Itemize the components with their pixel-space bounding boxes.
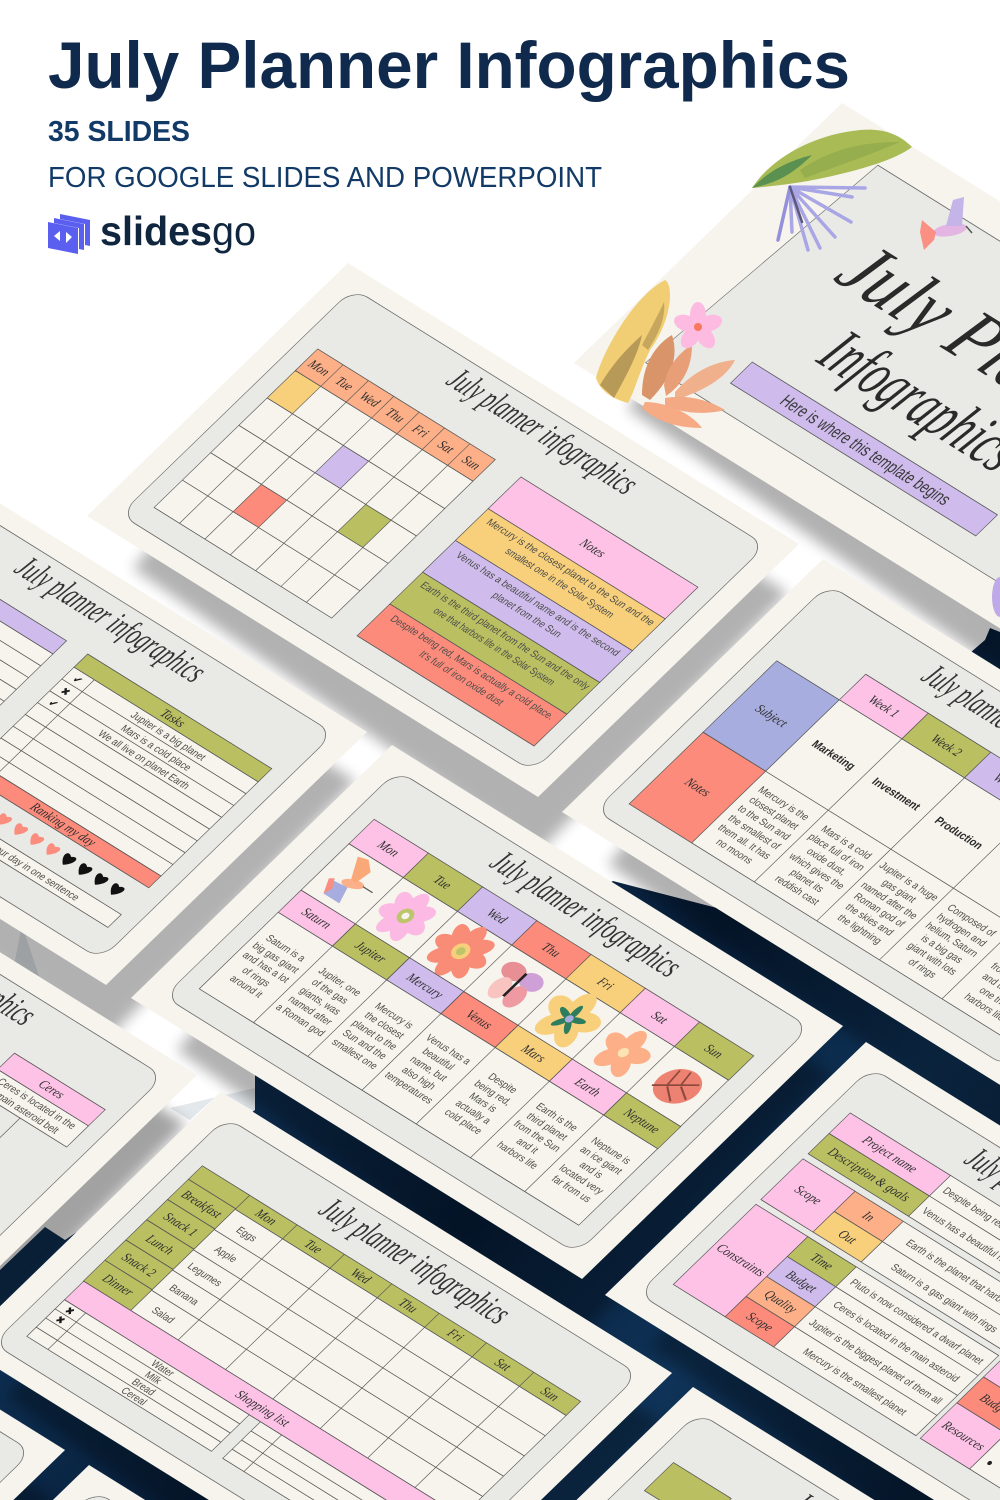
day headers: Sat xyxy=(648,1008,672,1027)
day headers: Sun xyxy=(701,1041,726,1061)
flower cells xyxy=(301,844,728,1126)
shopping table left: Cereal xyxy=(118,1386,149,1408)
planet descriptions: also high xyxy=(399,1065,438,1092)
subject table xyxy=(629,635,1000,1038)
icon: pink flower xyxy=(360,881,450,952)
subject table: Mars is a cold xyxy=(818,824,874,862)
planet descriptions: a Roman god xyxy=(273,1002,327,1039)
subject table: which gives the xyxy=(785,851,847,892)
scope rows: Out xyxy=(835,1227,860,1247)
planet descriptions: Earth is the xyxy=(533,1101,580,1134)
subject table: Week 1 xyxy=(865,693,903,720)
subject table: the lightning xyxy=(834,913,884,947)
meal grid: Lunch xyxy=(142,1231,177,1257)
slide: lower left xyxy=(0,1169,65,1500)
ceres card: Ceres xyxy=(35,1077,68,1102)
tasks table: ✔ xyxy=(45,697,61,710)
tasks table: Jupiter is a big planet xyxy=(127,710,208,763)
ranking header: Ranking my day xyxy=(26,799,100,849)
planet headers: Mercury xyxy=(402,970,447,1002)
subject table: to the Sun and xyxy=(734,804,793,843)
icon: peach flower xyxy=(580,1018,667,1087)
meal grid: Sat xyxy=(491,1355,515,1374)
notes table: planet from the Sun xyxy=(489,590,564,640)
icon: green leaf xyxy=(752,130,912,188)
constraints rows: Constraints xyxy=(713,1241,769,1279)
planet descriptions: Despite xyxy=(485,1072,520,1096)
subject table: them all. It has xyxy=(715,823,773,862)
planet descriptions: planet to the xyxy=(349,1018,400,1053)
subject table: gas giant xyxy=(879,878,918,905)
scope rows: Saturn is a gas giant with rings xyxy=(888,1262,1000,1335)
constraints rows: Mercury is the smallest planet xyxy=(800,1347,909,1418)
notes table xyxy=(357,477,698,746)
planet headers: Neptune xyxy=(620,1105,664,1136)
shopping table left: ✖ xyxy=(61,1305,77,1318)
icon: hummingbird xyxy=(920,197,972,250)
constraints rows: Ceres is located in the main asteroid xyxy=(830,1300,961,1385)
meal grid: Salad xyxy=(148,1305,177,1326)
planet descriptions: giants, was xyxy=(296,985,343,1018)
planet descriptions: and it xyxy=(513,1136,541,1156)
cover title xyxy=(762,228,1000,527)
planet descriptions: Saturn is a xyxy=(263,933,308,964)
tasks table: Tasks xyxy=(157,706,189,730)
meal grid: Eggs xyxy=(233,1225,259,1244)
cover panel xyxy=(646,154,1000,634)
notes table: one that harbors life in the Solar System xyxy=(430,606,557,688)
resources block xyxy=(920,1360,1000,1500)
subject table: Composed of xyxy=(944,903,998,939)
tasks table: ✔ xyxy=(69,674,85,687)
calendar grid: Thu xyxy=(382,405,408,425)
constraints rows: Budget xyxy=(782,1268,821,1296)
scope rows xyxy=(761,1159,1000,1438)
project rows: Project name xyxy=(858,1133,921,1176)
planet headers: Jupiter xyxy=(352,938,390,966)
constraints rows: Jupiter is the biggest planet of them all xyxy=(806,1318,944,1407)
hearts rating xyxy=(0,792,126,898)
day headers: Mon xyxy=(373,837,403,859)
planet descriptions: the closest xyxy=(361,1010,406,1041)
subject table: Production xyxy=(931,815,986,852)
slide: meal planner xyxy=(0,1092,672,1500)
icon: lilac blob at edge xyxy=(992,577,1000,617)
subject table: planet its xyxy=(787,868,826,895)
heading: slide count: 35 SLIDES xyxy=(48,116,190,148)
icon: yellow leaf xyxy=(596,280,670,403)
shopping table left: Milk xyxy=(142,1370,164,1387)
calendar grid: Tue xyxy=(332,374,357,393)
tasks table: Mars is a cold place xyxy=(118,723,194,774)
planet descriptions: Mercury is xyxy=(372,1001,416,1031)
notes table: Notes xyxy=(576,536,609,560)
meal grid: Fri xyxy=(443,1325,467,1344)
notes table: It's full of iron oxide dust xyxy=(416,649,506,708)
planet descriptions: located very xyxy=(556,1163,606,1197)
planet descriptions: and is xyxy=(576,1160,605,1181)
planet descriptions: Mars is xyxy=(466,1091,499,1115)
shopping table left: Water xyxy=(148,1359,177,1380)
meal grid: Banana xyxy=(166,1283,201,1308)
subject table: place full of iron xyxy=(805,832,867,873)
notes table: smallest one in the Solar System xyxy=(502,546,616,621)
planet descriptions: of rings xyxy=(239,965,272,989)
meal grid: Apple xyxy=(211,1245,240,1265)
planet descriptions: name, but xyxy=(407,1054,449,1084)
logo wordmark: slidesgo xyxy=(100,208,256,254)
planet descriptions: Venus has a xyxy=(423,1033,473,1067)
calendar grid: Fri xyxy=(408,421,432,440)
planet descriptions: of the gas xyxy=(308,977,350,1007)
constraints rows: Quality xyxy=(761,1287,801,1316)
planet descriptions: Neptune is xyxy=(588,1136,633,1167)
subject table: is a big gas xyxy=(918,933,965,966)
resources block: Resources xyxy=(938,1418,989,1453)
day headers: Thu xyxy=(538,940,564,960)
ranking header xyxy=(0,639,161,888)
planet descriptions: beautiful xyxy=(419,1046,457,1073)
subject table: named after the xyxy=(858,880,920,922)
planet headers xyxy=(278,890,681,1149)
ceres card xyxy=(0,1053,105,1147)
subject table: hydrogen and xyxy=(934,912,989,949)
subject table: Subject xyxy=(752,702,791,730)
planet descriptions: cold place xyxy=(441,1107,485,1137)
shopping table left: ✖ xyxy=(52,1314,68,1327)
shopping list band: Shopping list xyxy=(232,1387,294,1430)
day headers: Tue xyxy=(430,873,455,892)
subject table: Roman god of xyxy=(851,892,907,930)
meal grid xyxy=(83,1166,581,1500)
cover subtitle band xyxy=(730,362,997,536)
planet descriptions: and has a lot xyxy=(239,950,292,986)
planet descriptions: actually a xyxy=(452,1098,493,1127)
slide title: July planner infographics xyxy=(438,362,647,502)
project rows: Description & goals xyxy=(824,1144,914,1204)
meal grid: Mon xyxy=(251,1206,280,1228)
subject table: Notes xyxy=(681,775,714,799)
calendar grid xyxy=(154,349,495,618)
slide: lower right xyxy=(432,1387,1000,1500)
meal grid: Dinner xyxy=(98,1271,137,1299)
calendar grid: Wed xyxy=(356,389,384,410)
slide: cover xyxy=(574,103,1000,693)
planet descriptions: being red, xyxy=(471,1079,514,1108)
icon: lilac palm xyxy=(778,187,865,250)
subject table: reddish cast xyxy=(772,874,822,908)
shopping table right xyxy=(223,1422,443,1500)
subject table: Marketing xyxy=(809,739,858,773)
meal grid: Breakfast xyxy=(178,1188,226,1221)
notes table: Venus has a beautiful name and is the second xyxy=(453,550,622,659)
tasks table xyxy=(0,654,272,876)
scope rows: In xyxy=(858,1208,878,1224)
planet descriptions: big gas giant xyxy=(249,941,301,976)
calendar grid: Mon xyxy=(304,357,333,379)
planet descriptions: third planet xyxy=(523,1111,570,1143)
meal grid: Sun xyxy=(537,1384,563,1404)
shopping table left: Bread xyxy=(129,1377,157,1398)
subject table: of rings xyxy=(905,957,938,981)
meal grid: Snack 2 xyxy=(118,1250,159,1280)
icon: slidesgo logo xyxy=(48,214,90,254)
notes table: Despite being red, Mars is actually a cold place. xyxy=(387,614,557,722)
day headers: Wed xyxy=(483,906,511,927)
constraints rows: Pluto is now considered a dwarf planet xyxy=(847,1278,986,1367)
slide: project xyxy=(605,1042,1000,1500)
subject table: giant with lots xyxy=(904,941,959,978)
slide: weekly subjects xyxy=(562,559,1000,1149)
subject table: Investment xyxy=(869,776,923,813)
tasks table: We all live on planet Earth xyxy=(95,729,192,792)
pale backdrop shapes xyxy=(10,925,255,1120)
planet descriptions: smallest one xyxy=(329,1037,380,1072)
slide: calendar xyxy=(87,263,799,853)
planet descriptions: from the Sun xyxy=(511,1119,563,1154)
subject table: Week 2 xyxy=(927,732,965,759)
notes table: Earth is the third planet from the Sun and the only xyxy=(417,580,592,692)
planet descriptions: harbors life xyxy=(494,1140,540,1172)
planet headers: Mars xyxy=(517,1041,549,1065)
navy backdrop xyxy=(0,628,1000,1500)
subject table: closest planet xyxy=(746,795,801,832)
slide title: July planner infographics xyxy=(6,550,215,690)
subject table: oxide dust, xyxy=(803,846,849,878)
icon: pink flower xyxy=(672,302,724,352)
icon: butterfly xyxy=(478,958,549,1013)
planet headers: Earth xyxy=(571,1075,604,1099)
subject table: no moons xyxy=(713,837,755,866)
slide: flowers week xyxy=(131,745,843,1335)
meal grid: Thu xyxy=(395,1296,421,1316)
planet descriptions: far from us xyxy=(549,1174,594,1205)
green header xyxy=(644,1463,731,1500)
planet descriptions: Jupiter, one xyxy=(315,966,364,999)
icon: orange leaves xyxy=(642,335,735,428)
planet descriptions: named after xyxy=(285,994,335,1028)
subject table: the smallest of xyxy=(725,813,783,852)
meal grid: Tue xyxy=(301,1237,326,1256)
scope rows: Scope xyxy=(791,1183,825,1208)
day sentence row xyxy=(0,677,121,927)
day headers: Fri xyxy=(593,974,617,993)
left table xyxy=(0,532,67,748)
slide title: July planner infographics xyxy=(482,844,690,984)
project rows xyxy=(808,1113,1000,1392)
planet headers: Venus xyxy=(462,1007,496,1032)
slide: bottom xyxy=(0,1465,540,1500)
constraints rows: Scope xyxy=(743,1309,777,1334)
day headers xyxy=(349,819,754,1080)
meal grid: Wed xyxy=(347,1266,375,1287)
planet descriptions: an ice giant xyxy=(577,1145,625,1177)
planet descriptions: temperatures xyxy=(382,1070,435,1106)
slide: tasks xyxy=(0,451,367,1041)
meal grid: Legumes xyxy=(184,1261,224,1289)
shopping table left xyxy=(26,1300,249,1452)
icon: coral flower xyxy=(413,913,509,990)
icon: yellow flower xyxy=(518,979,620,1059)
text: subtitle: FOR GOOGLE SLIDES AND POWERPOINT xyxy=(48,162,602,194)
planet descriptions: around it xyxy=(227,974,265,1000)
tasks table: ✖ xyxy=(57,685,73,699)
calendar grid: Sun xyxy=(459,453,484,472)
constraints rows xyxy=(673,1204,999,1436)
subject table: Jupiter is a huge xyxy=(876,860,941,904)
planet descriptions xyxy=(199,844,728,1225)
subject table: the skies and xyxy=(842,902,896,938)
notes table: Mercury is the closest planet to the Sun and the xyxy=(483,517,657,629)
icon: hummingbird xyxy=(317,852,392,912)
shopping list band xyxy=(65,1281,462,1500)
slide: ceres xyxy=(0,794,197,1384)
subject table: helium, Saturn xyxy=(922,921,980,960)
subject table: Mercury is the xyxy=(755,785,812,823)
planet descriptions: Sun and the xyxy=(339,1028,389,1062)
heading: title: July Planner Infographics xyxy=(48,28,850,102)
icon: monstera leaf xyxy=(634,1052,721,1121)
slide title: July planner infographics xyxy=(311,1191,519,1331)
planet headers: Saturn xyxy=(298,905,335,932)
meal grid: Snack 1 xyxy=(160,1210,201,1239)
constraints rows: Time xyxy=(807,1251,837,1273)
cover subtitle band: Here is where this template begins xyxy=(775,391,956,509)
calendar grid: Sat xyxy=(434,438,458,456)
